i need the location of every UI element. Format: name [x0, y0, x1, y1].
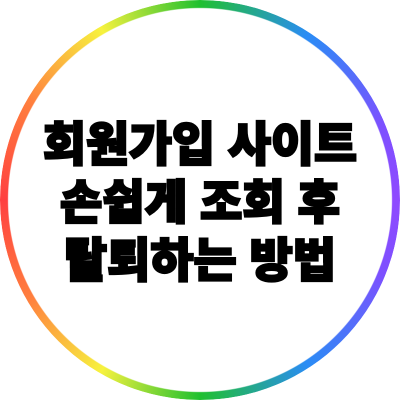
- title: 손쉽게 조회 후: [60, 176, 340, 229]
- title: 탈퇴하는 방법: [64, 234, 336, 287]
- title: 회원가입 사이트: [43, 118, 357, 171]
